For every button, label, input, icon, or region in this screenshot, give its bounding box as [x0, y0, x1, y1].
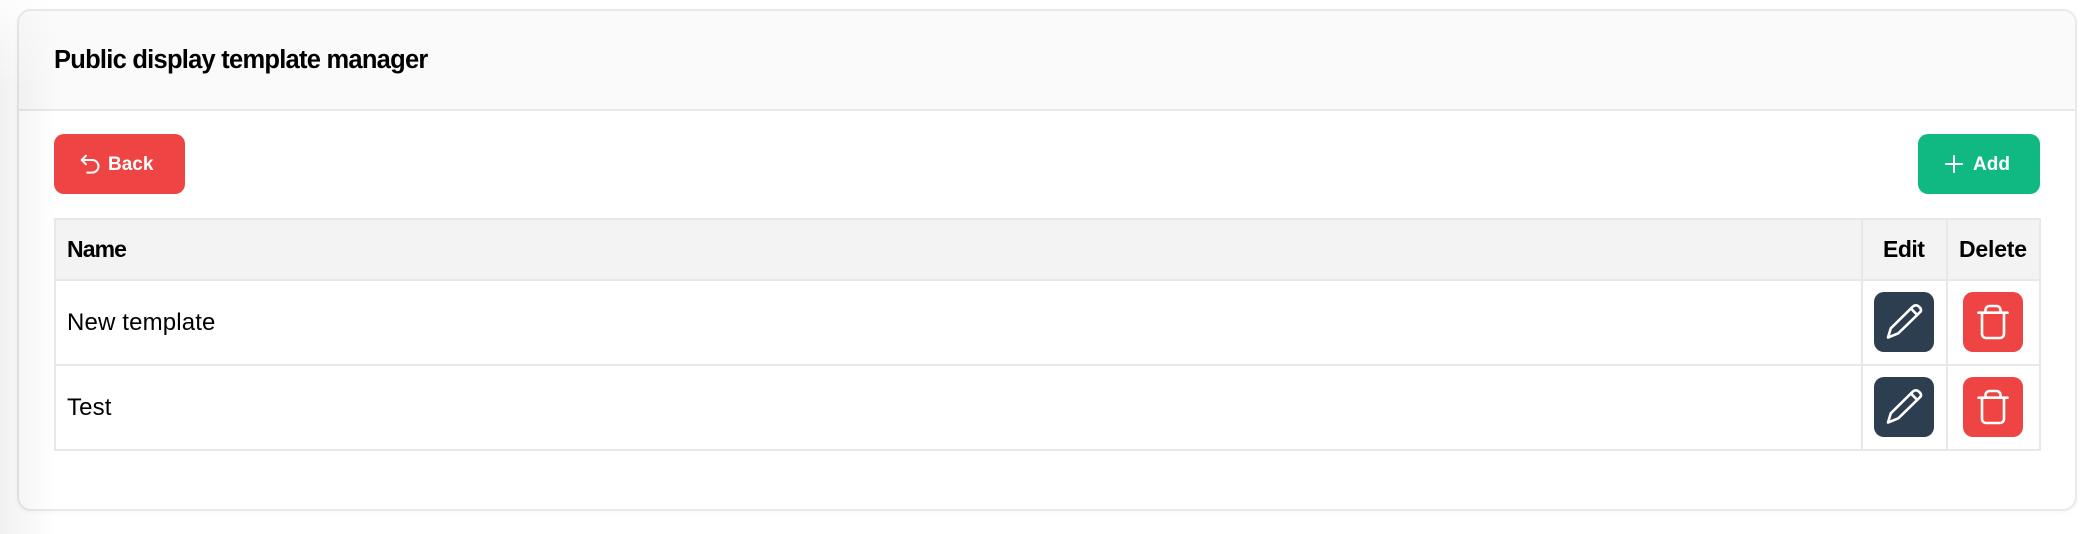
button: back [54, 134, 185, 194]
icon: trash [1977, 390, 2009, 424]
column heading: Edit: Edit [1883, 236, 1924, 262]
table: templates [54, 218, 2041, 451]
table header row [54, 218, 2040, 280]
icon: pencil [1886, 389, 1922, 424]
icon: back arrow [80, 154, 100, 174]
button: add [1918, 134, 2040, 194]
icon: plus [1945, 155, 1963, 173]
column heading: Name: Name [67, 236, 126, 262]
button: delete row 2 [1963, 377, 2023, 437]
button: edit row 1 [1874, 292, 1934, 352]
title: Public display template manager [54, 46, 428, 74]
row text: Test: Test [67, 394, 112, 421]
button label: Back: Back [108, 154, 153, 175]
button label: Add: Add [1973, 154, 2010, 175]
button: edit row 2 [1874, 377, 1934, 437]
icon: pencil [1886, 304, 1922, 339]
left edge shadow [0, 46, 22, 534]
row text: New template: New template [67, 309, 216, 336]
card header band [19, 11, 2075, 111]
column heading: Delete: Delete [1959, 236, 2027, 262]
button: delete row 1 [1963, 292, 2023, 352]
icon: trash [1977, 304, 2009, 340]
